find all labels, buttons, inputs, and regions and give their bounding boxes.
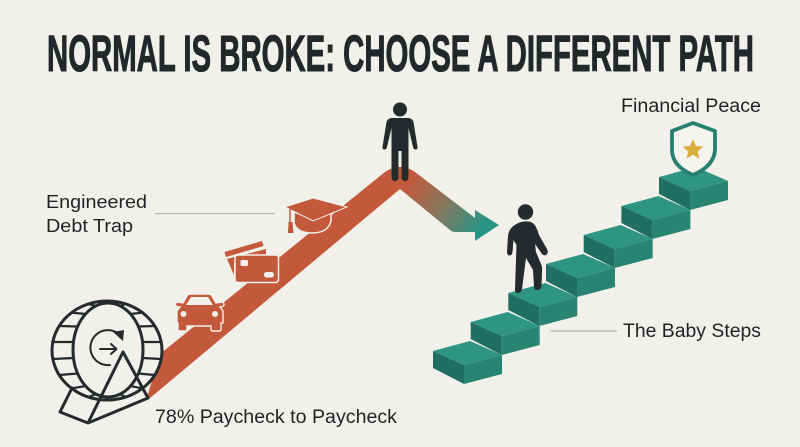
step 6 [621, 196, 690, 239]
label: 78% paycheck to paycheck: 78% Paycheck to Paycheck [155, 407, 398, 428]
step 4 [546, 254, 615, 297]
icon: credit cards [224, 241, 278, 282]
descending arrow from peak to stairs [400, 167, 499, 241]
stairs: the baby steps [433, 167, 728, 384]
step 5 [584, 225, 653, 268]
step 3 [508, 283, 577, 326]
figure: person on peak [382, 102, 418, 181]
icon: graduation cap [285, 198, 347, 233]
rising debt path [147, 167, 402, 398]
icon: shield with star [672, 123, 715, 175]
icon: hamster wheel [52, 301, 162, 423]
label: engineered debt trap: Debt Trap [46, 216, 133, 236]
label: the baby steps: The Baby Steps [623, 321, 761, 342]
step 7 [659, 167, 728, 210]
star [682, 139, 704, 159]
figure: person climbing stairs [507, 204, 548, 293]
label: engineered debt trap [46, 192, 275, 236]
icon: car [175, 294, 224, 331]
label: financial peace: Financial Peace [621, 96, 761, 117]
step 2 [471, 312, 540, 355]
label: engineered debt trap: Engineered [46, 192, 147, 212]
step 1 [433, 341, 502, 384]
